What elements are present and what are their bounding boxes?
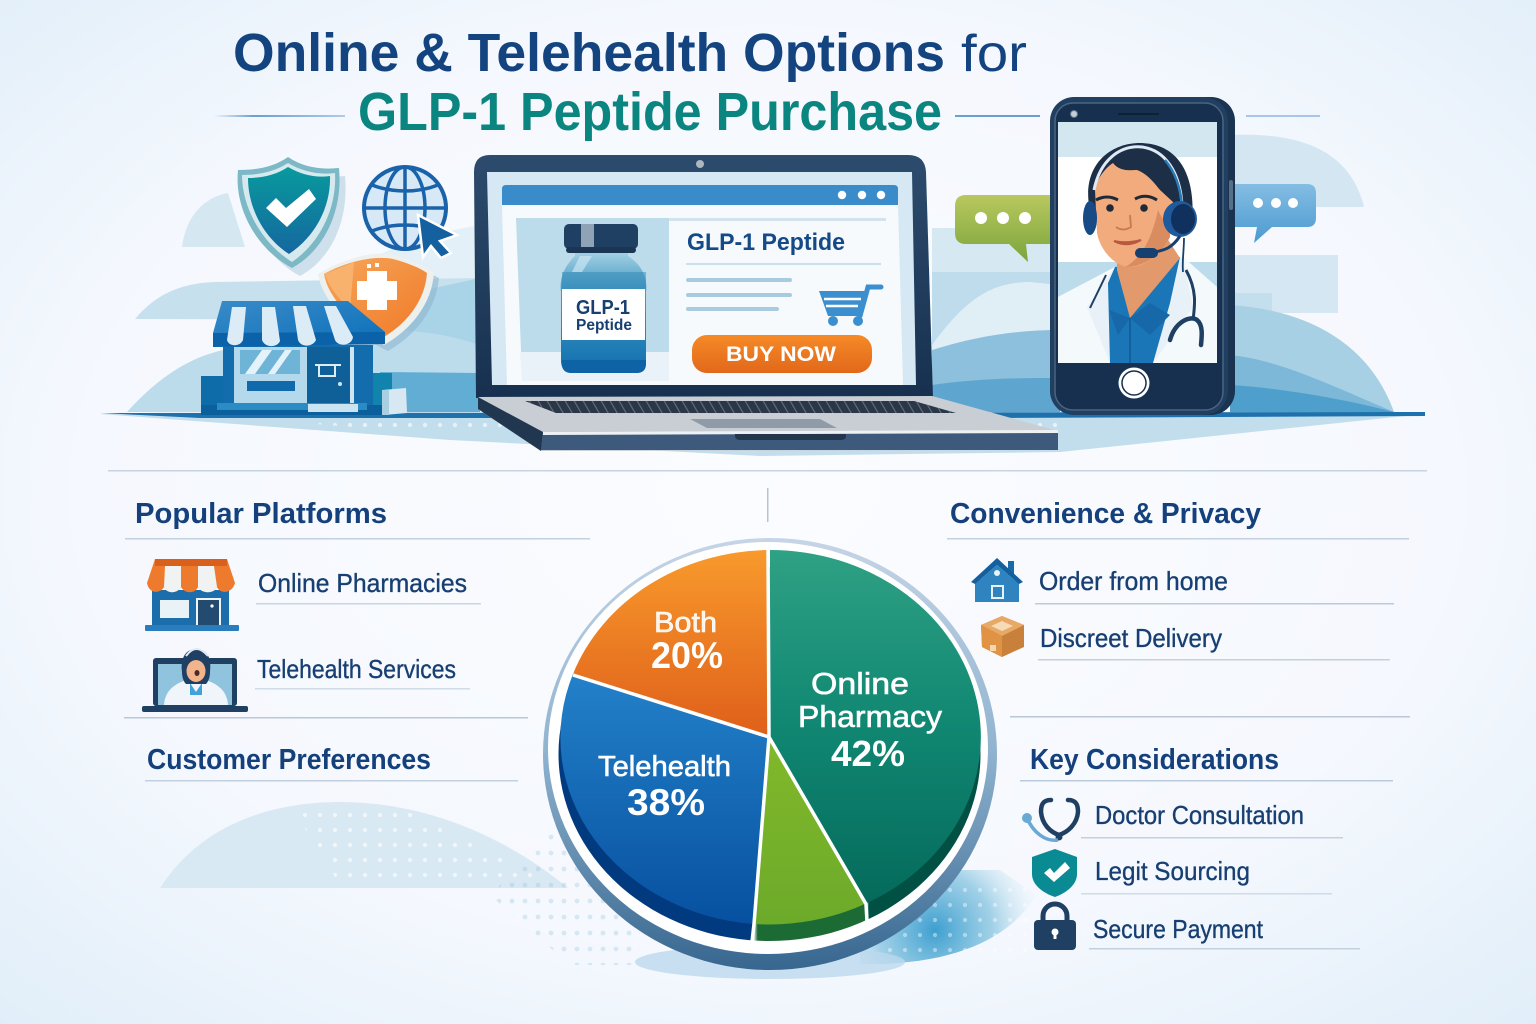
doctor hair <box>1088 143 1193 210</box>
icon: shopping cart <box>819 287 881 326</box>
icon: teal security shield <box>238 157 346 276</box>
icon: stethoscope <box>1022 800 1078 840</box>
text: online pharmacies: Online Pharmacies <box>258 568 467 598</box>
icon: orange medical shield <box>318 254 439 351</box>
smartphone with doctor <box>1050 97 1235 415</box>
icon: globe with cursor <box>364 167 457 258</box>
icon: small telehealth laptop <box>142 649 248 712</box>
label: telehealth: 38% <box>627 782 705 823</box>
heading: key considerations: Key Considerations <box>1030 744 1279 776</box>
title <box>214 23 1320 142</box>
section divider <box>108 470 1427 472</box>
text: legit sourcing: Legit Sourcing <box>1095 856 1250 886</box>
decorative blob lower left <box>160 802 640 965</box>
label: online pharmacy <box>798 666 943 774</box>
text: order from home: Order from home <box>1039 566 1228 596</box>
panel: popular platforms <box>125 498 590 712</box>
label: online pharmacy: 42% <box>831 733 905 774</box>
panel: convenience and privacy <box>947 498 1409 660</box>
icon: green chat bubble <box>955 195 1052 262</box>
doctor coat <box>1058 257 1217 363</box>
label: both: Both <box>654 607 717 639</box>
slice: both 20% <box>573 550 770 737</box>
title: Online & Telehealth Options <box>233 23 945 83</box>
icon: pharmacy storefront <box>201 301 407 415</box>
text: telehealth services: Telehealth Services <box>257 654 456 684</box>
hero background shapes <box>100 135 1425 456</box>
doctor face <box>1095 163 1173 267</box>
heading: customer preferences: Customer Preferences <box>147 744 431 776</box>
product image panel <box>516 218 669 381</box>
vial <box>561 224 646 373</box>
pie depth <box>558 567 980 941</box>
pie chart glow <box>635 870 1036 979</box>
icon: padlock <box>1034 904 1076 950</box>
text: discreet delivery: Discreet Delivery <box>1040 623 1222 653</box>
text: doctor consultation: Doctor Consultation <box>1095 800 1304 830</box>
laptop base <box>478 396 1058 451</box>
label: telehealth <box>598 751 731 823</box>
heading: convenience and privacy: Convenience & Privacy <box>950 498 1261 530</box>
product name: GLP-1 Peptide <box>687 229 845 256</box>
home button <box>1118 368 1150 398</box>
icon: teal check shield <box>1032 849 1077 897</box>
icon: small storefront <box>145 559 239 631</box>
label: online pharmacy: Online <box>811 666 909 701</box>
laptop lid <box>474 155 933 398</box>
label: telehealth: Telehealth <box>598 751 731 783</box>
icon: house <box>971 558 1023 602</box>
buy now button: BUY NOW <box>726 343 836 366</box>
title: for <box>961 25 1027 83</box>
icon: blue chat bubble <box>1232 184 1316 243</box>
panel: key considerations <box>1020 744 1393 950</box>
pie chart <box>543 538 997 970</box>
laptop screen <box>487 172 916 385</box>
vial: GLP-1 <box>576 297 630 319</box>
label: online pharmacy: Pharmacy <box>798 699 943 734</box>
slice: online pharmacy 42% <box>770 550 981 903</box>
vial: Peptide <box>576 317 632 334</box>
title: GLP-1 Peptide Purchase <box>358 82 942 142</box>
label: both: 20% <box>651 635 723 676</box>
text: secure payment: Secure Payment <box>1093 914 1264 944</box>
label: both <box>651 607 723 676</box>
slice: unlabeled green <box>754 737 867 924</box>
laptop <box>474 155 1058 451</box>
doctor headset <box>1094 147 1182 205</box>
buy now button <box>692 335 872 373</box>
heading: popular platforms: Popular Platforms <box>135 498 387 530</box>
icon: package box <box>981 616 1024 657</box>
slice: telehealth 38% <box>560 674 770 924</box>
phone screen <box>1058 122 1217 363</box>
